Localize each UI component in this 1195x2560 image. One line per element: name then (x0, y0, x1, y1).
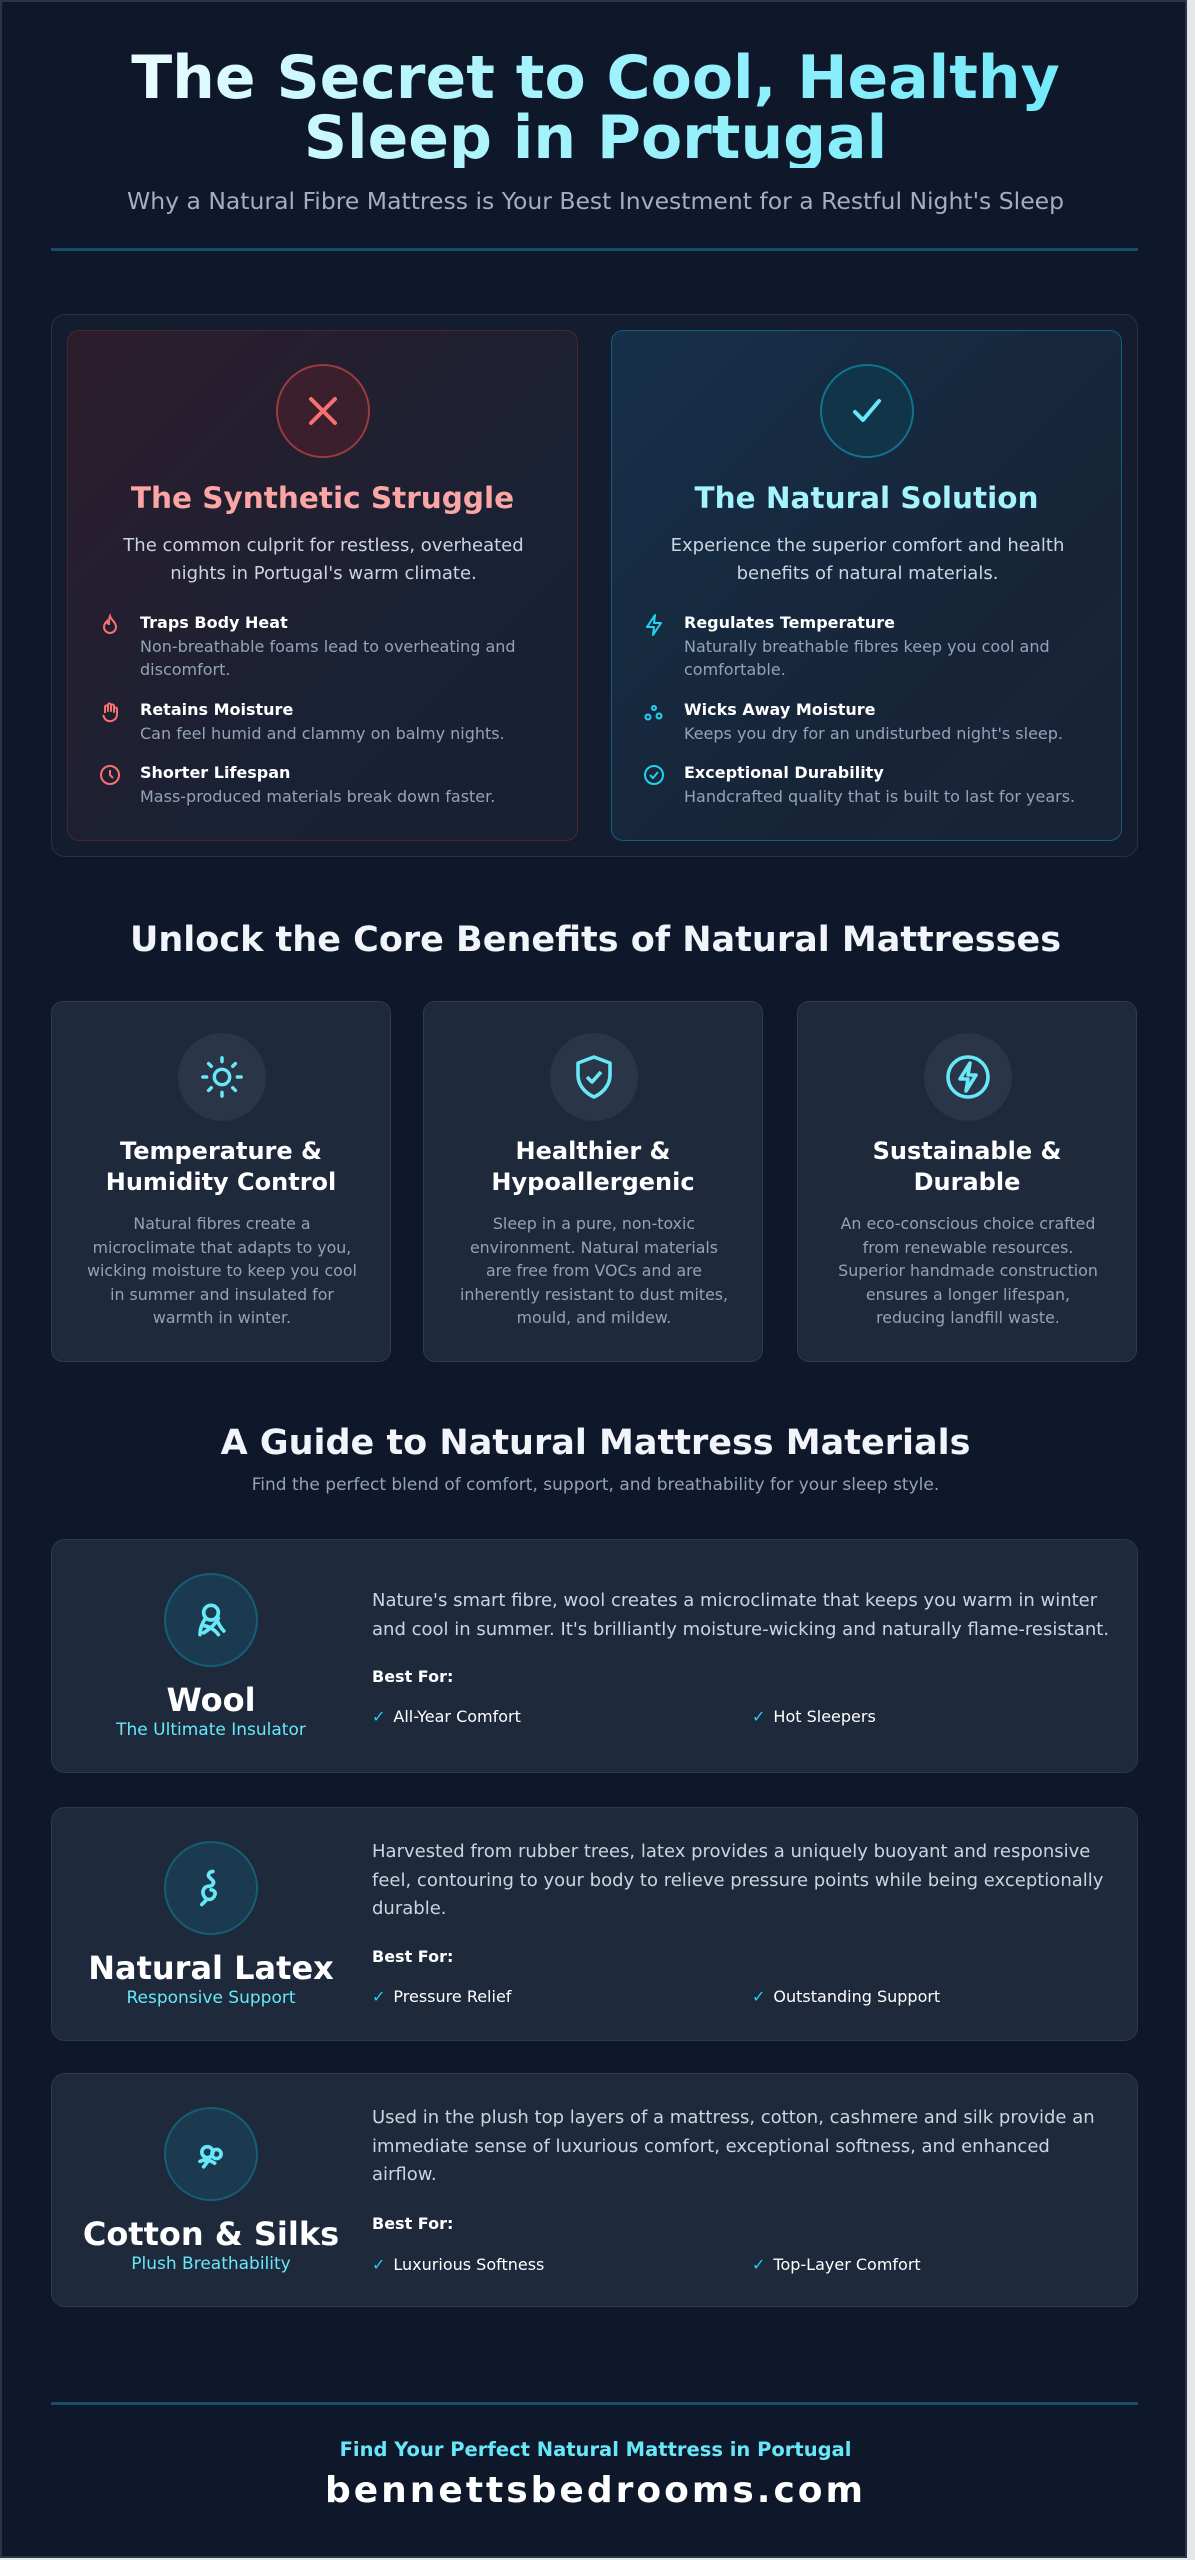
item: traps body heat: Traps Body Heat (140, 613, 288, 632)
item: shorter lifespan (100, 763, 495, 806)
subtitle: Why a Natural Fibre Mattress is Your Best Investment for a Restful Night's Sleep (127, 187, 1064, 215)
card: wool: Best For: (372, 1667, 453, 1686)
panel: comparison (51, 314, 1138, 857)
card: cotton & silks: ✓ Luxurious Softness (372, 2255, 544, 2274)
text: guide subtitle: Find the perfect blend of comfort, support, and breathability for your sleep style. (252, 1475, 939, 1495)
title (2, 48, 1189, 168)
card: sustainable: Durable (914, 1168, 1020, 1196)
card: sustainable (797, 1001, 1137, 1362)
icon: cotton (164, 2107, 258, 2201)
icon: cross (276, 364, 370, 458)
icon: latex (164, 1841, 258, 1935)
item: regulates temperature (646, 613, 1050, 679)
card: healthier: Healthier & (516, 1137, 670, 1165)
item: wicks moisture: Wicks Away Moisture (684, 700, 876, 719)
title: Sleep in Portugal (304, 103, 887, 173)
card: temperature (51, 1001, 391, 1362)
card: cotton & silks: Best For: (372, 2214, 453, 2233)
card: latex (51, 1807, 1138, 2041)
card: wool (51, 1539, 1138, 1773)
item: regulates temperature: Regulates Temperature (684, 613, 895, 632)
panel: synthetic struggle (67, 330, 578, 841)
item: wicks moisture: Keeps you dry for an undisturbed night's sleep. (684, 724, 1063, 743)
item: wicks moisture (644, 700, 1063, 743)
item: traps body heat: Non-breathable foams lead to overheating and discomfort. (140, 637, 516, 679)
item: retains moisture: Can feel humid and clammy on balmy nights. (140, 724, 505, 743)
card: wool: Nature's smart fibre, wool creates a microclimate that keeps you warm in winter and cool in summer. It's brilliantly moisture-wicking and naturally flame-resistant. (372, 1590, 1109, 1640)
heading: materials guide: A Guide to Natural Mattress Materials (221, 1423, 970, 1463)
card: latex: Best For: (372, 1947, 453, 1966)
footer domain: bennettsbedrooms.com (325, 2470, 866, 2511)
card: cotton & silks: ✓ Top-Layer Comfort (752, 2255, 921, 2274)
card: wool: The Ultimate Insulator (116, 1720, 306, 1740)
card: wool: ✓ All-Year Comfort (372, 1707, 521, 1726)
text: synthetic intro: The common culprit for restless, overheated nights in Portugal's warm climate. (123, 535, 524, 584)
heading: synthetic: The Synthetic Struggle (131, 481, 514, 515)
card: temperature: Temperature & (120, 1137, 322, 1165)
card: healthier: Hypoallergenic (491, 1168, 695, 1196)
heading: natural: The Natural Solution (694, 481, 1039, 515)
panel: natural solution (611, 330, 1122, 841)
card: temperature: Humidity Control (106, 1168, 336, 1196)
icon: energy circle (924, 1033, 1012, 1121)
card: cotton & silks: Cotton & Silks (83, 2215, 339, 2253)
icon: check (820, 364, 914, 458)
card: cotton & silks (51, 2073, 1138, 2307)
title: The Secret to Cool, Healthy (131, 43, 1060, 113)
item: durability: Exceptional Durability (684, 763, 884, 782)
item: retains moisture: Retains Moisture (140, 700, 293, 719)
card: healthier: Sleep in a pure, non-toxic environment. Natural materials are free from VOCs and are inherently resistant to dust mites, mould, and mildew. (460, 1214, 728, 1327)
item: durability: Handcrafted quality that is built to last for years. (684, 787, 1075, 806)
card: latex: Harvested from rubber trees, latex provides a uniquely buoyant and responsive feel, contouring to your body to relieve pressure points while being exceptionally durable. (372, 1841, 1103, 1919)
item: shorter lifespan: Shorter Lifespan (140, 763, 290, 782)
item: durability (644, 763, 1075, 806)
item: traps body heat (103, 613, 516, 679)
card: latex: Responsive Support (126, 1988, 296, 2008)
item: regulates temperature: Naturally breathable fibres keep you cool and comfortable. (684, 637, 1050, 679)
text: natural intro: Experience the superior comfort and health benefits of natural materials. (671, 535, 1064, 584)
icon: sun (178, 1033, 266, 1121)
card: cotton & silks: Used in the plush top layers of a mattress, cotton, cashmere and silk provide an immediate sense of luxurious comfort, exceptional softness, and enhanced airflow. (372, 2107, 1095, 2185)
card: latex: ✓ Outstanding Support (752, 1987, 940, 2006)
card: latex: Natural Latex (88, 1949, 334, 1987)
card: wool: ✓ Hot Sleepers (752, 1707, 876, 1726)
icon: wool (164, 1573, 258, 1667)
card: sustainable: Sustainable & (873, 1137, 1061, 1165)
card: cotton & silks: Plush Breathability (131, 2254, 291, 2274)
footer tagline: Find Your Perfect Natural Mattress in Portugal (340, 2438, 851, 2461)
icon: shield (550, 1033, 638, 1121)
card: latex: ✓ Pressure Relief (372, 1987, 511, 2006)
card: sustainable: An eco-conscious choice crafted from renewable resources. Superior handmade construction ensures a longer lifespan, reducing landfill waste. (838, 1214, 1098, 1327)
card: temperature: Natural fibres create a microclimate that adapts to you, wicking moisture to keep you cool in summer and insulated for warmth in winter. (87, 1214, 357, 1327)
item: retains moisture (102, 700, 505, 743)
item: shorter lifespan: Mass-produced materials break down faster. (140, 787, 495, 806)
card: wool: Wool (166, 1681, 256, 1719)
card: healthier (423, 1001, 763, 1362)
heading: core benefits: Unlock the Core Benefits of Natural Mattresses (130, 920, 1061, 960)
